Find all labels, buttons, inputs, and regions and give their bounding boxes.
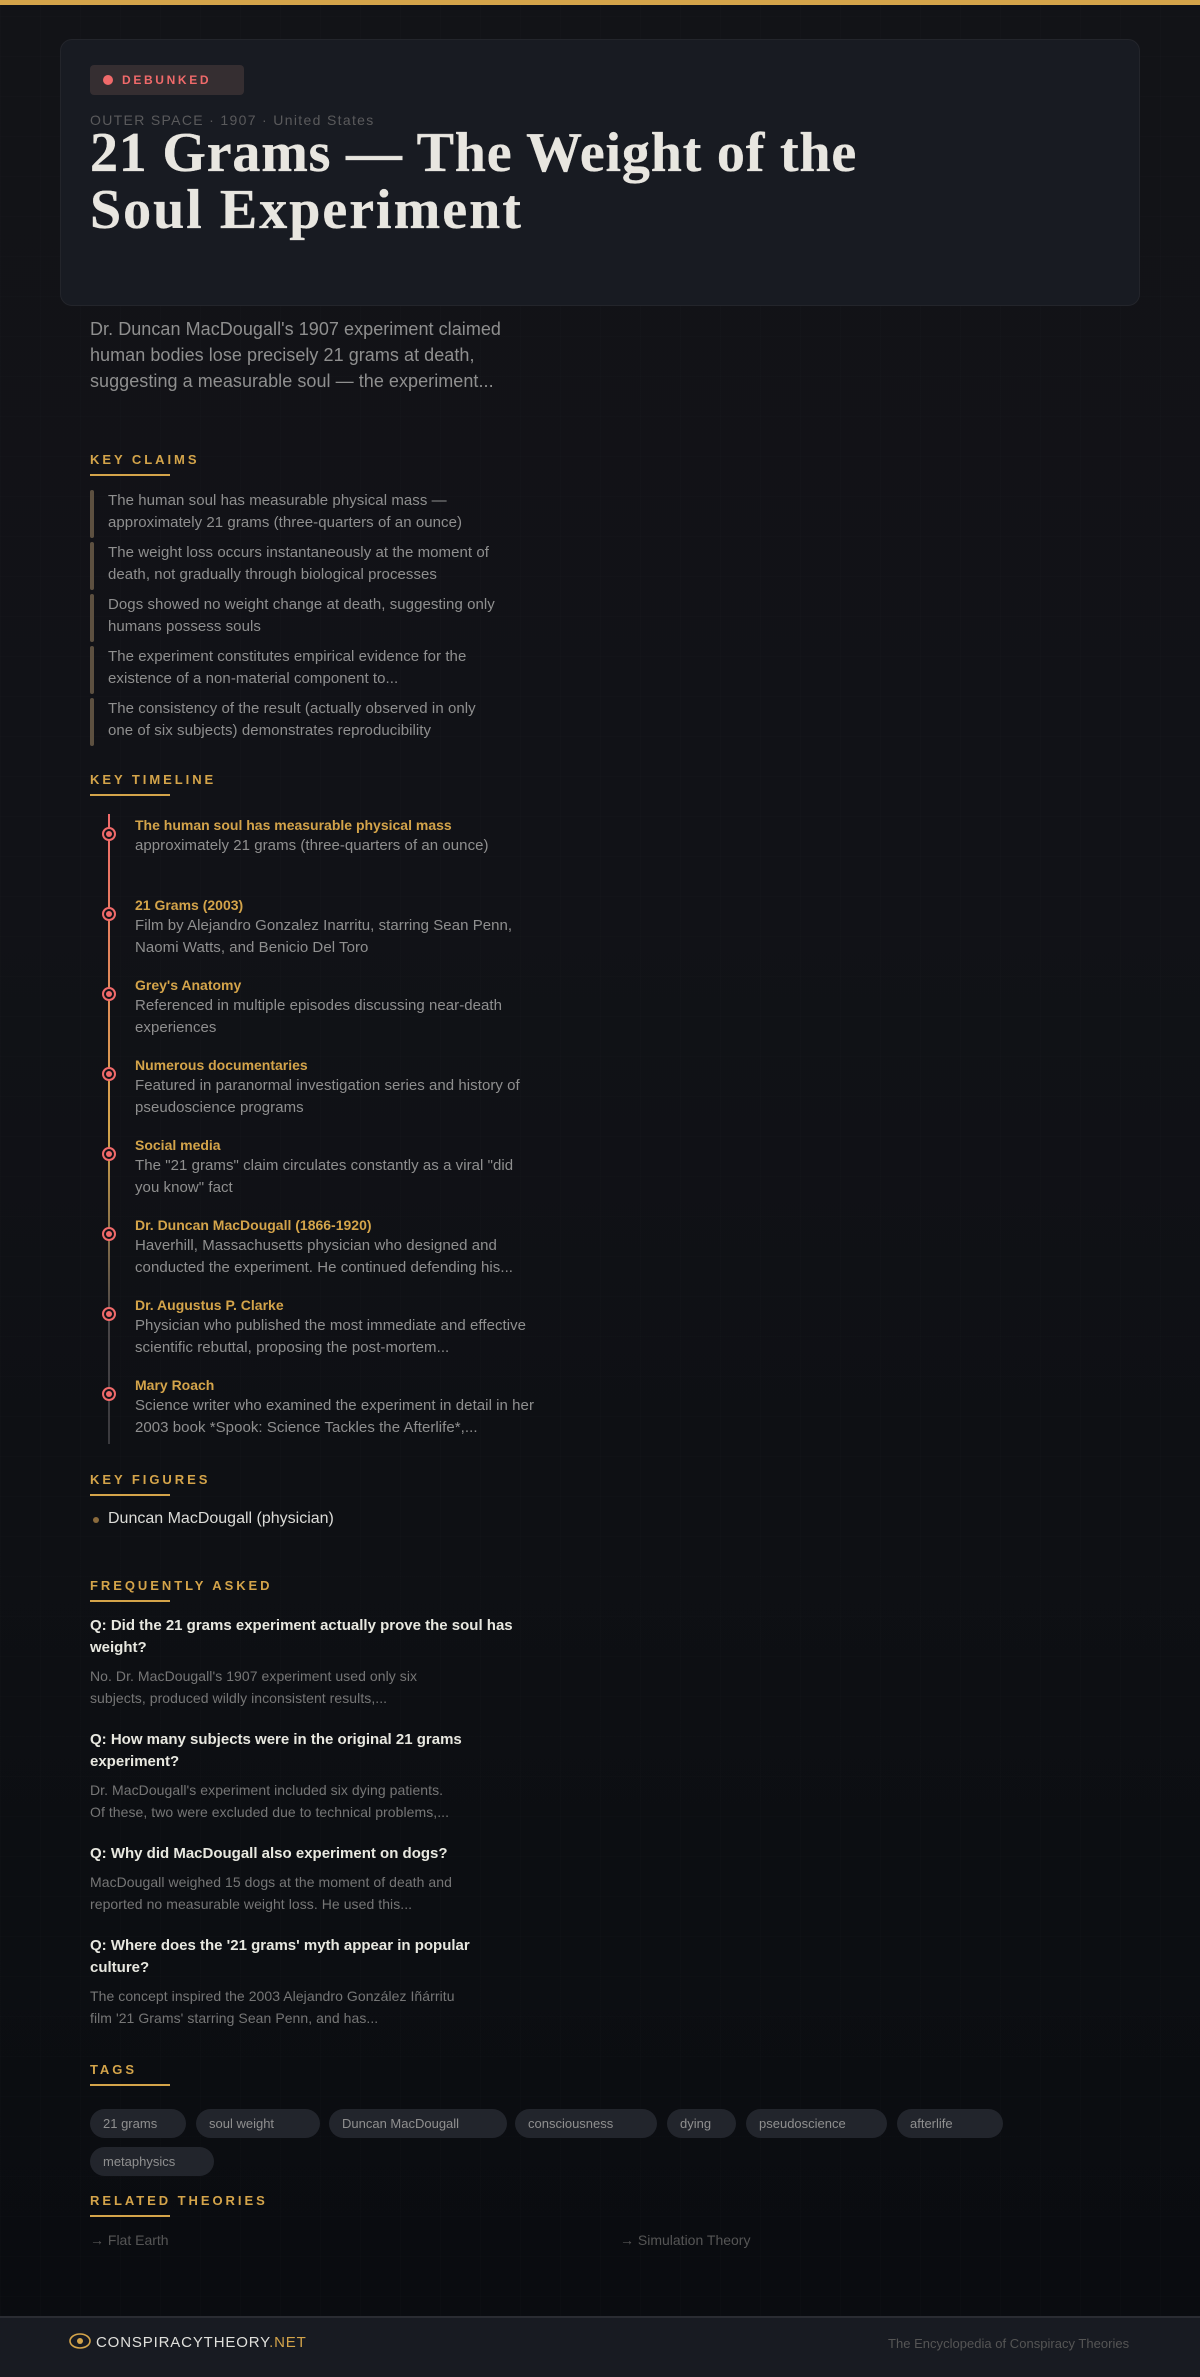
tag: pseudoscience <box>759 2116 846 2131</box>
faq 2: experiment? <box>90 1753 179 1770</box>
timeline item 1: approximately 21 grams (three-quarters of an ounce) <box>135 837 489 854</box>
tag <box>329 2109 507 2138</box>
timeline item 4: pseudoscience programs <box>135 1099 304 1116</box>
timeline item 3: experiences <box>135 1019 216 1036</box>
timeline item 1: The human soul has measurable physical mass <box>135 817 452 833</box>
tag: soul weight <box>209 2116 274 2131</box>
timeline item 3 <box>135 977 502 1036</box>
timeline item 4: Numerous documentaries <box>135 1057 308 1073</box>
timeline item 6: Dr. Duncan MacDougall (1866-1920) <box>135 1217 372 1233</box>
faq 2: Dr. MacDougall's experiment included six dying patients. <box>90 1782 443 1798</box>
summary paragraph: suggesting a measurable soul — the experiment... <box>90 371 494 391</box>
panel: hero header <box>60 39 1140 306</box>
footer tagline: The Encyclopedia of Conspiracy Theories <box>888 2336 1129 2351</box>
timeline item 7: Physician who published the most immediate and effective <box>135 1317 526 1334</box>
top accent bar <box>0 0 1200 5</box>
status badge: debunked <box>90 65 244 95</box>
title: 21 Grams — The Weight of the <box>90 122 857 184</box>
claim 4 <box>90 646 466 694</box>
faq 4: culture? <box>90 1959 149 1976</box>
timeline line and markers <box>102 814 116 1444</box>
claim 2: The weight loss occurs instantaneously at the moment of <box>108 544 489 561</box>
tag <box>90 2147 214 2176</box>
metadata line: OUTER SPACE · 1907 · United States <box>90 112 375 128</box>
claim 2 <box>90 542 489 590</box>
faq 2 <box>90 1731 462 1820</box>
timeline item 5: Social media <box>135 1137 221 1153</box>
claim 5: one of six subjects) demonstrates reproducibility <box>108 722 431 739</box>
timeline item 6: Haverhill, Massachusetts physician who designed and <box>135 1237 497 1254</box>
faq 4: The concept inspired the 2003 Alejandro González Iñárritu <box>90 1988 455 2004</box>
icon: eye logo <box>69 2333 91 2349</box>
icon: bullet <box>93 1517 99 1523</box>
summary paragraph: Dr. Duncan MacDougall's 1907 experiment claimed <box>90 319 501 339</box>
summary paragraph <box>90 319 501 391</box>
timeline item 4: Featured in paranormal investigation series and history of <box>135 1077 520 1094</box>
heading: frequently asked: FREQUENTLY ASKED <box>90 1578 273 1593</box>
heading: tags: TAGS <box>90 2062 137 2077</box>
timeline item 7: scientific rebuttal, proposing the post-mortem... <box>135 1339 449 1356</box>
timeline item 2 <box>135 897 512 956</box>
heading: key timeline: KEY TIMELINE <box>90 772 216 787</box>
heading: related theories: RELATED THEORIES <box>90 2193 268 2208</box>
timeline item 5: The "21 grams" claim circulates constantly as a viral "did <box>135 1157 513 1174</box>
timeline item 6 <box>135 1217 513 1276</box>
badge label: DEBUNKED <box>122 73 211 87</box>
claim 1 <box>90 490 462 538</box>
title <box>90 122 857 241</box>
claim 4: existence of a non-material component to... <box>108 670 398 687</box>
timeline item 5 <box>135 1137 513 1196</box>
figure name: Duncan MacDougall (physician) <box>108 1510 334 1527</box>
title: Soul Experiment <box>90 179 523 241</box>
timeline item 6: conducted the experiment. He continued defending his... <box>135 1259 513 1276</box>
timeline item 7 <box>135 1297 526 1356</box>
claim 3 <box>90 594 495 642</box>
claim 5: The consistency of the result (actually observed in only <box>108 700 476 717</box>
tag: 21 grams <box>103 2116 157 2131</box>
claim 2: death, not gradually through biological processes <box>108 566 437 583</box>
timeline item 4 <box>135 1057 520 1116</box>
faq 1 <box>90 1617 513 1706</box>
faq 4: film '21 Grams' starring Sean Penn, and has... <box>90 2010 378 2026</box>
tag pills <box>90 2109 1003 2176</box>
icon: status dot <box>103 75 113 85</box>
tag: metaphysics <box>103 2154 175 2169</box>
claim 3: humans possess souls <box>108 618 261 635</box>
faq 2: Q: How many subjects were in the original 21 grams <box>90 1731 462 1748</box>
claim 1: The human soul has measurable physical mass — <box>108 492 447 509</box>
tag <box>196 2109 320 2138</box>
summary paragraph: human bodies lose precisely 21 grams at death, <box>90 345 475 365</box>
key figure entry <box>93 1510 334 1527</box>
claim 3: Dogs showed no weight change at death, suggesting only <box>108 596 495 613</box>
timeline item 3: Grey's Anatomy <box>135 977 241 993</box>
faq 1: subjects, produced wildly inconsistent results,... <box>90 1690 387 1706</box>
tag: consciousness <box>528 2116 613 2131</box>
tag: dying <box>680 2116 711 2131</box>
faq 3: Q: Why did MacDougall also experiment on dogs? <box>90 1845 448 1862</box>
timeline item 8: Science writer who examined the experiment in detail in her <box>135 1397 534 1414</box>
tag <box>897 2109 1003 2138</box>
timeline item 2: 21 Grams (2003) <box>135 897 243 913</box>
claim 5 <box>90 698 476 746</box>
timeline item 3: Referenced in multiple episodes discussing near-death <box>135 997 502 1014</box>
timeline item 2: Film by Alejandro Gonzalez Inarritu, starring Sean Penn, <box>135 917 512 934</box>
claim 1: approximately 21 grams (three-quarters of an ounce) <box>108 514 462 531</box>
claim 4: The experiment constitutes empirical evidence for the <box>108 648 466 665</box>
timeline item 8: 2003 book *Spook: Science Tackles the Afterlife*,... <box>135 1419 478 1436</box>
faq 4: Q: Where does the '21 grams' myth appear in popular <box>90 1937 470 1954</box>
tag <box>90 2109 186 2138</box>
heading: key claims: KEY CLAIMS <box>90 452 199 467</box>
faq 4 <box>90 1937 470 2026</box>
timeline item 7: Dr. Augustus P. Clarke <box>135 1297 284 1313</box>
tag <box>515 2109 657 2138</box>
timeline item 2: Naomi Watts, and Benicio Del Toro <box>135 939 368 956</box>
faq 1: Q: Did the 21 grams experiment actually prove the soul has <box>90 1617 513 1634</box>
heading: key figures: KEY FIGURES <box>90 1472 210 1487</box>
timeline item 8: Mary Roach <box>135 1377 214 1393</box>
faq 3: reported no measurable weight loss. He used this... <box>90 1896 412 1912</box>
tag: afterlife <box>910 2116 953 2131</box>
timeline item 8 <box>135 1377 534 1436</box>
related link: simulation theory: → Simulation Theory <box>620 2232 750 2248</box>
tag: Duncan MacDougall <box>342 2116 459 2131</box>
faq 1: No. Dr. MacDougall's 1907 experiment used only six <box>90 1668 417 1684</box>
faq 2: Of these, two were excluded due to technical problems,... <box>90 1804 449 1820</box>
related link: flat earth: → Flat Earth <box>90 2232 169 2248</box>
timeline item 1 <box>135 817 489 854</box>
tag <box>667 2109 736 2138</box>
site logotype: CONSPIRACYTHEORY.NET <box>96 2334 307 2351</box>
footer bar <box>0 2316 1200 2377</box>
faq 1: weight? <box>90 1639 147 1656</box>
tag <box>746 2109 887 2138</box>
timeline item 5: you know" fact <box>135 1179 233 1196</box>
faq 3 <box>90 1845 452 1912</box>
faq 3: MacDougall weighed 15 dogs at the moment of death and <box>90 1874 452 1890</box>
